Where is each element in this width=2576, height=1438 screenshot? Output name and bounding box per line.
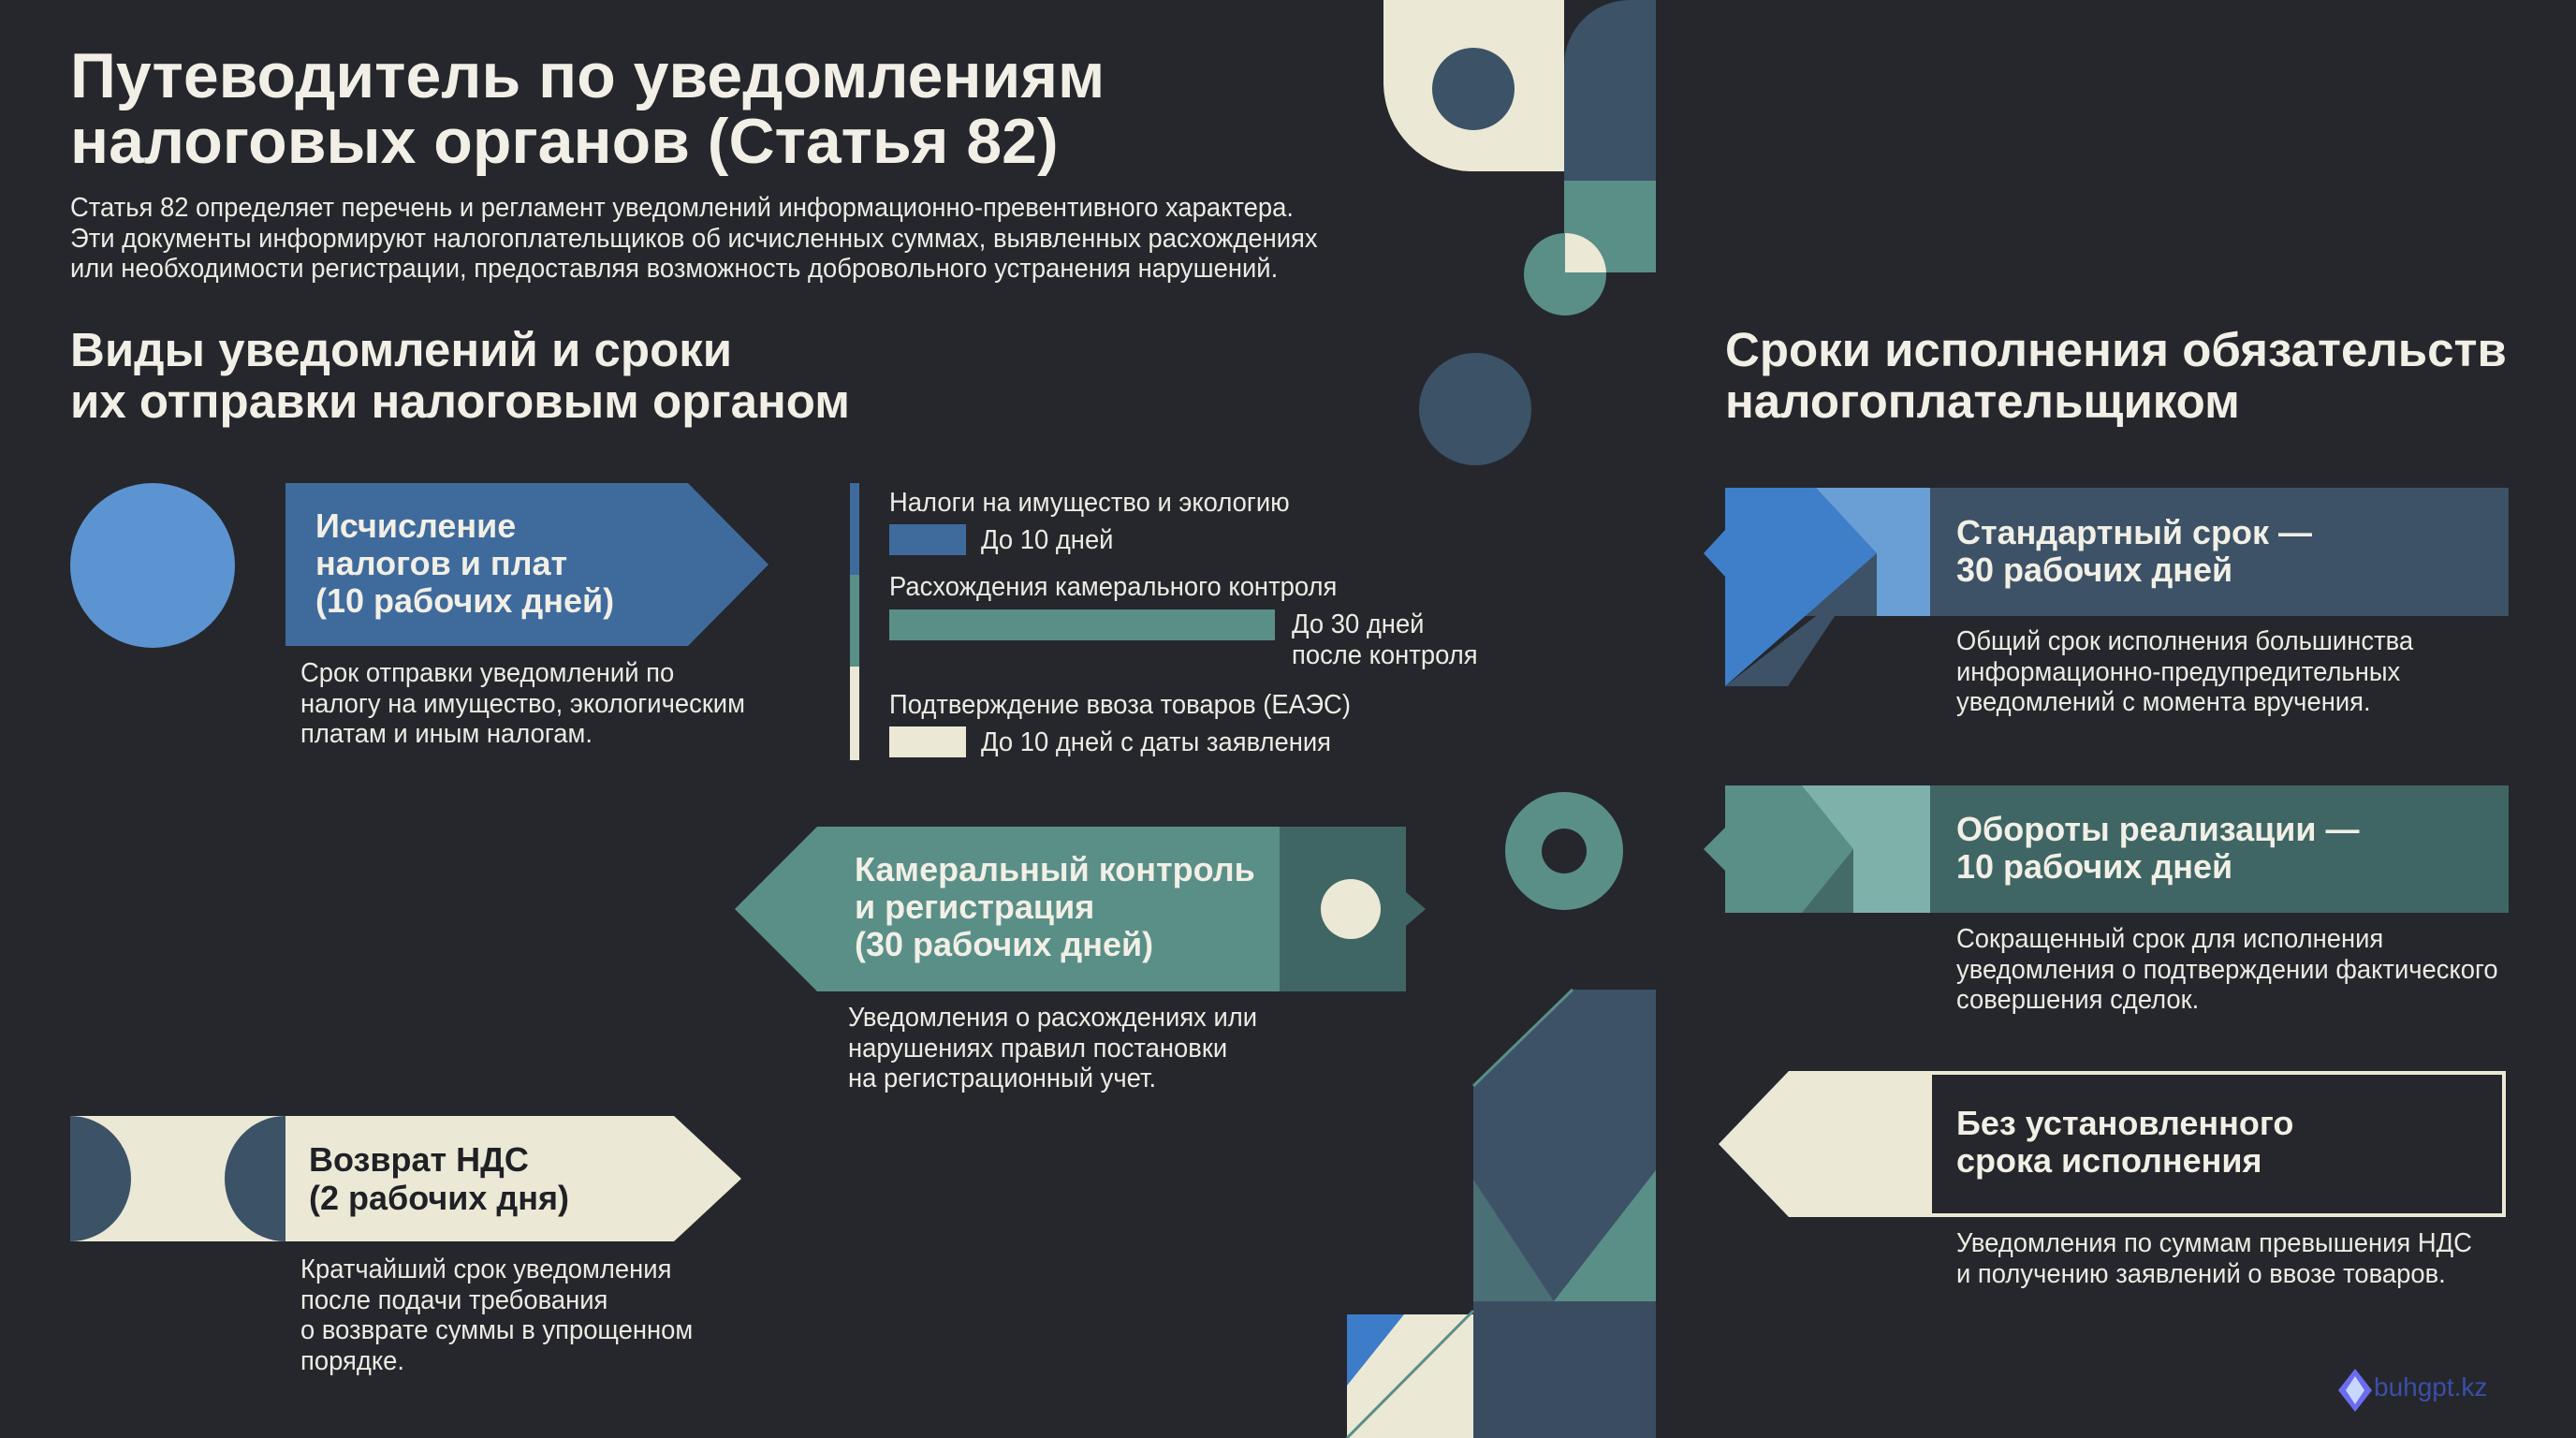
decor: top cream ring shape xyxy=(1383,0,1564,171)
logo: buhgpt.kz xyxy=(2338,1369,2487,1412)
title xyxy=(70,40,1105,177)
text: desk control description: на регистрационный учет. xyxy=(848,1064,1156,1093)
banner: tax calculation: Исчисление xyxy=(315,506,516,545)
text: standard term description: информационно-предупредительных xyxy=(1956,657,2400,687)
icon: blue circle xyxy=(70,483,235,648)
heading: left section xyxy=(70,323,850,428)
chart: notice deadlines bars: До 30 дней xyxy=(1292,609,1424,639)
text: tax calculation description: платам и иным налогам. xyxy=(300,719,593,749)
banner: desk control and registration xyxy=(735,827,1426,991)
text: VAT refund description xyxy=(300,1255,693,1376)
decor: top slate block xyxy=(1524,0,1656,315)
text: VAT refund description: порядке. xyxy=(300,1346,404,1376)
text: tax calculation description: Срок отправки уведомлений по xyxy=(300,658,674,688)
text: desk control description: нарушениях правил постановки xyxy=(848,1034,1227,1064)
card: sales turnover xyxy=(1704,785,2509,913)
chart: notice deadlines bars: Подтверждение ввоза товаров (ЕАЭС) xyxy=(889,690,1351,720)
intro text: Статья 82 определяет перечень и регламент уведомлений информационно-превентивного характера. xyxy=(70,193,1294,223)
chart: notice deadlines bars: До 10 дней с даты заявления xyxy=(981,727,1331,757)
decor: teal ring xyxy=(1505,792,1623,910)
chart: notice deadlines bars: Расхождения камерального контроля xyxy=(889,572,1337,602)
text: tax calculation description: налогу на имущество, экологическим xyxy=(300,689,745,719)
decor: bottom geometric column xyxy=(1347,990,1656,1438)
text: sales turnover description: совершения сделок. xyxy=(1956,985,2199,1015)
card: sales turnover: Обороты реализации — xyxy=(1956,810,2360,848)
text: standard term description: Общий срок исполнения большинства xyxy=(1956,626,2413,656)
card: no deadline: Без установленного xyxy=(1956,1104,2293,1142)
banner: tax calculation: (10 рабочих дней) xyxy=(315,581,614,620)
card: standard term xyxy=(1704,488,2509,686)
heading: left section: их отправки налоговым органом xyxy=(70,374,850,428)
text: no deadline description: и получению заявлений о ввозе товаров. xyxy=(1956,1258,2446,1288)
intro text: или необходимости регистрации, предоставляя возможность добровольного устранения нарушений. xyxy=(70,254,1278,284)
banner: VAT refund: (2 рабочих дня) xyxy=(309,1179,569,1217)
text: desk control description xyxy=(848,1003,1257,1093)
text: no deadline description xyxy=(1956,1228,2472,1288)
logo: buhgpt.kz: buhgpt.kz xyxy=(2374,1372,2487,1401)
title: налоговых органов (Статья 82) xyxy=(70,106,1059,177)
banner: tax calculation: налогов и плат xyxy=(315,544,567,582)
text: no deadline description: Уведомления по суммам превышения НДС xyxy=(1956,1228,2472,1258)
text: sales turnover description: Сокращенный срок для исполнения xyxy=(1956,924,2383,954)
chart: notice deadlines bars: Налоги на имущество и экологию xyxy=(889,488,1290,518)
card: no deadline: срока исполнения xyxy=(1956,1141,2262,1180)
chart: notice deadlines bars: До 10 дней xyxy=(981,525,1113,555)
banner: desk control and registration: и регистрация xyxy=(855,888,1094,926)
card: sales turnover: 10 рабочих дней xyxy=(1956,847,2232,886)
card: no deadline xyxy=(1719,1071,2506,1217)
banner: VAT refund xyxy=(70,1116,741,1241)
text: desk control description: Уведомления о расхождениях или xyxy=(848,1003,1257,1033)
text: tax calculation description xyxy=(300,658,745,749)
text: VAT refund description: о возврате суммы в упрощенном xyxy=(300,1315,693,1345)
card: standard term: Стандартный срок — xyxy=(1956,513,2312,551)
heading: left section: Виды уведомлений и сроки xyxy=(70,323,732,376)
text: standard term description: уведомлений с момента вручения. xyxy=(1956,687,2371,717)
intro text xyxy=(70,193,1318,284)
banner: tax calculation xyxy=(285,483,768,646)
banner: VAT refund: Возврат НДС xyxy=(309,1140,529,1179)
heading: right section xyxy=(1725,323,2507,428)
card: standard term: 30 рабочих дней xyxy=(1956,550,2232,589)
chart: notice deadlines bars xyxy=(850,483,1478,760)
banner: desk control and registration: Камеральный контроль xyxy=(855,850,1255,888)
heading: right section: Сроки исполнения обязательств xyxy=(1725,323,2507,376)
text: VAT refund description: Кратчайший срок уведомления xyxy=(300,1255,671,1284)
text: sales turnover description xyxy=(1956,924,2498,1015)
text: VAT refund description: после подачи требования xyxy=(300,1284,607,1314)
decor: slate circle xyxy=(1419,353,1531,465)
title: Путеводитель по уведомлениям xyxy=(70,40,1105,111)
text: sales turnover description: уведомления о подтверждении фактического xyxy=(1956,955,2498,985)
intro text: Эти документы информируют налогоплательщиков об исчисленных суммах, выявленных расхождениях xyxy=(70,223,1318,253)
text: standard term description xyxy=(1956,626,2413,717)
chart: notice deadlines bars: после контроля xyxy=(1292,640,1478,670)
heading: right section: налогоплательщиком xyxy=(1725,374,2240,428)
banner: desk control and registration: (30 рабочих дней) xyxy=(855,925,1153,963)
